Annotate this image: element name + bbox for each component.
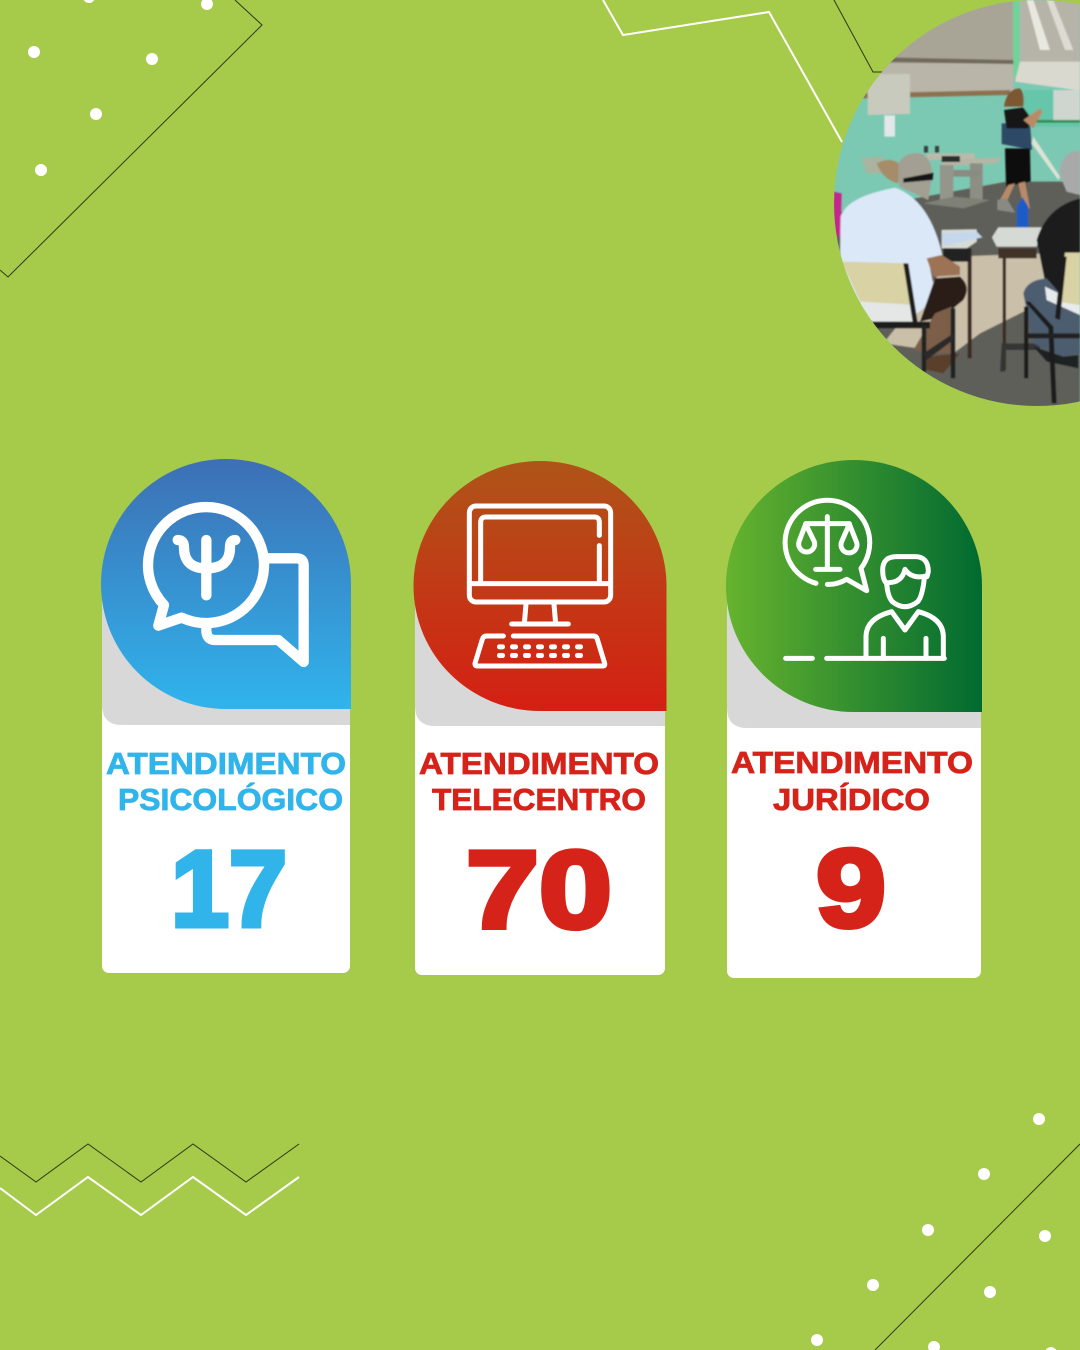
label: TELECENTRO (432, 782, 646, 817)
table left (942, 229, 977, 248)
label: ATENDIMENTO (419, 746, 659, 781)
grey shadow band (727, 590, 981, 728)
label (106, 746, 346, 817)
label (731, 745, 973, 817)
label: ATENDIMENTO (731, 745, 973, 780)
card body (102, 600, 350, 973)
number: 17 (171, 828, 287, 949)
grey shadow band (102, 590, 350, 725)
teardrop (414, 461, 667, 711)
decorative lines top right (603, 0, 890, 142)
wall details (1023, 90, 1080, 127)
teardrop (101, 459, 351, 709)
man left (833, 192, 842, 237)
card 3: atendimento jurídico (726, 460, 982, 978)
photo: classroom in circle (830, 0, 1080, 410)
chair right (1058, 253, 1080, 305)
decorative zigzag bottom left (0, 1144, 299, 1215)
table back (927, 153, 975, 160)
decorative dots bottom right (811, 1113, 1057, 1350)
label: PSICOLÓGICO (118, 781, 343, 817)
icon: speech bubbles with psi (148, 507, 304, 662)
card 1: atendimento psicológico (101, 459, 351, 973)
card body (727, 600, 981, 978)
decorative line bottom right (875, 1144, 1080, 1350)
number: 9 (816, 828, 886, 950)
chair left (842, 262, 915, 305)
label (419, 746, 659, 817)
label: ATENDIMENTO (106, 746, 346, 781)
card body (415, 600, 665, 975)
icon: computer (469, 506, 611, 666)
table right (992, 227, 1042, 247)
number: 70 (466, 828, 612, 952)
bottle (1017, 197, 1028, 230)
grey shadow band (415, 590, 665, 726)
card 2: atendimento telecentro (414, 461, 667, 975)
woman (1004, 88, 1024, 107)
canopy (866, 2, 1014, 94)
teardrop (726, 460, 982, 712)
man right (1037, 198, 1080, 300)
icon: legal advisor (785, 500, 944, 658)
label: JURÍDICO (773, 782, 930, 817)
decorative lines top left (0, 0, 262, 277)
decorative dots top left (28, 0, 213, 176)
floor (833, 182, 1080, 410)
